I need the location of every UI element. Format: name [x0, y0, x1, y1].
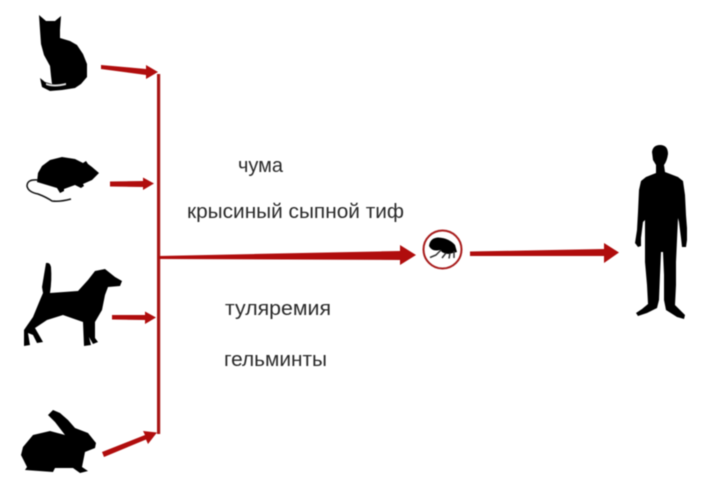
arrow: dog to trunk: [112, 312, 156, 324]
icon: flea in circle: [424, 230, 462, 268]
label: helminths: гельминты: [224, 349, 327, 371]
label: tularemia: туляремия: [225, 298, 331, 320]
icon: rat: [27, 157, 99, 201]
label: plague: чума: [238, 155, 284, 177]
label: murine typhus: крысиный сыпной тиф: [187, 201, 404, 223]
icon: rabbit: [21, 410, 96, 473]
arrow: cat to trunk: [101, 65, 158, 79]
icon: dog: [24, 263, 122, 346]
icon: cat: [39, 15, 87, 91]
arrow: rat to trunk: [110, 178, 154, 190]
icon: human silhouette: [635, 145, 687, 319]
trunk line: [157, 74, 160, 434]
arrow: trunk to flea: [159, 245, 416, 265]
arrow: flea to human: [470, 243, 619, 263]
arrow: rabbit to trunk: [102, 431, 157, 457]
